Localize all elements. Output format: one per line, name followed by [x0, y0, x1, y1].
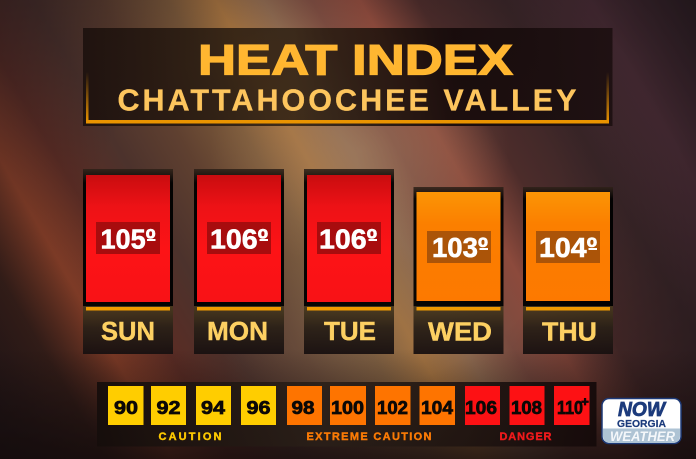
- logo: Now Georgia Weather: NOW: [618, 399, 667, 421]
- card: Tuesday: 106º: [319, 224, 377, 254]
- scale swatches: caution: [108, 386, 276, 425]
- scale swatches: danger: [465, 386, 590, 425]
- card: Wednesday: [414, 187, 504, 354]
- logo: Now Georgia Weather: WEATHER: [610, 429, 675, 444]
- scale swatches: danger: 108: [511, 397, 542, 418]
- card: Wednesday: 103º: [432, 232, 488, 263]
- card: Thursday: [523, 187, 613, 354]
- scale swatches: extreme caution: 98: [292, 397, 314, 418]
- scale swatches: danger: 106: [465, 397, 497, 418]
- panel: heat scale legend: [97, 382, 596, 446]
- card: Tuesday: [304, 169, 394, 354]
- scale swatches: caution: 90: [114, 397, 138, 418]
- card: Monday: [194, 169, 284, 354]
- scale swatches: danger: +: [581, 394, 589, 409]
- title accent frame: [86, 72, 609, 124]
- subheading: region: CHATTAHOOCHEE VALLEY: [118, 84, 576, 118]
- card: Monday: MON: [207, 316, 268, 346]
- label: danger: DANGER: [500, 431, 552, 443]
- card: Thursday: THU: [542, 316, 597, 346]
- label: extreme caution: EXTREME CAUTION: [306, 431, 432, 443]
- logo: Now Georgia Weather: [602, 398, 681, 444]
- scale swatches: danger: 110: [557, 397, 583, 418]
- title panel: [83, 28, 612, 126]
- card: Sunday: 105º: [100, 224, 156, 254]
- card: Monday: 106º: [210, 224, 268, 254]
- scale swatches: extreme caution: 104: [421, 397, 454, 418]
- scale swatches: extreme caution: 100: [331, 397, 364, 418]
- card: Tuesday: TUE: [324, 316, 376, 346]
- scale swatches: extreme caution: 102: [377, 397, 408, 418]
- card: Wednesday: WED: [428, 316, 492, 346]
- logo: Now Georgia Weather: GEORGIA: [617, 418, 666, 430]
- label: caution: CAUTION: [158, 431, 222, 443]
- card: Thursday: 104º: [539, 232, 597, 263]
- scale swatches: caution: 94: [201, 397, 226, 418]
- heading: heat index: HEAT INDEX: [198, 36, 513, 84]
- card: Sunday: [83, 169, 173, 354]
- scale swatches: caution: 92: [156, 397, 180, 418]
- card: Sunday: SUN: [101, 316, 155, 346]
- scale swatches: caution: 96: [246, 397, 270, 418]
- scale swatches: extreme caution: [287, 386, 455, 425]
